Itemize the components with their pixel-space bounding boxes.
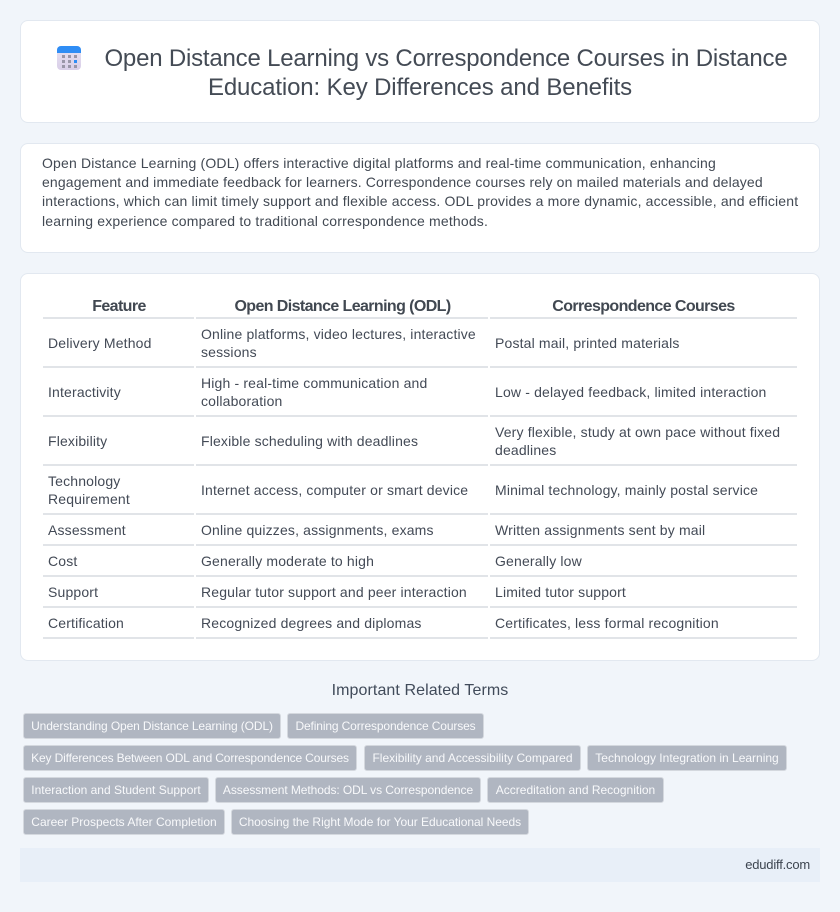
tag: Career Prospects After Completion	[31, 815, 217, 829]
table: Online platforms, video lectures, interactive	[201, 326, 476, 342]
row: interactivity: Interactivity	[48, 384, 121, 400]
tag: Assessment Methods: ODL vs Correspondence	[223, 783, 473, 797]
table header	[43, 298, 797, 319]
row: support: Support	[48, 584, 98, 600]
row: technology requirement: Requirement	[48, 491, 130, 507]
table: Limited tutor support	[495, 584, 626, 600]
tag: Understanding Open Distance Learning (ODL)	[31, 719, 273, 733]
tag	[23, 713, 281, 739]
row: assessment: Assessment	[48, 522, 126, 538]
related terms heading: Important Related Terms	[332, 682, 508, 699]
title	[104, 45, 788, 101]
tag: Defining Correspondence Courses	[295, 719, 476, 733]
summary text	[42, 155, 798, 229]
icon: calendar	[57, 46, 81, 70]
table: Minimal technology, mainly postal service	[495, 482, 758, 498]
row: delivery method: Delivery Method	[48, 335, 152, 351]
tag	[487, 777, 664, 803]
table: collaboration	[201, 393, 282, 409]
title: Open Distance Learning vs Correspondence Courses in Distance	[104, 45, 788, 72]
table: Regular tutor support and peer interaction	[201, 584, 467, 600]
table header: Open Distance Learning (ODL)	[234, 298, 451, 315]
table: Postal mail, printed materials	[495, 335, 680, 351]
table: Online quizzes, assignments, exams	[201, 522, 434, 538]
table: Very flexible, study at own pace without fixed	[495, 424, 780, 440]
tag: Accreditation and Recognition	[496, 783, 655, 797]
row: certification: Certification	[48, 615, 124, 631]
table: Generally moderate to high	[201, 553, 374, 569]
row: technology requirement: Technology	[48, 473, 120, 489]
tag	[364, 745, 581, 771]
row: flexibility: Flexibility	[48, 433, 107, 449]
footer text: edudiff.com	[745, 857, 810, 872]
table: Written assignments sent by mail	[495, 522, 705, 538]
table: Flexible scheduling with deadlines	[201, 433, 418, 449]
table: Certificates, less formal recognition	[495, 615, 719, 631]
related term tags	[23, 713, 787, 835]
tag	[215, 777, 481, 803]
table	[43, 298, 797, 639]
summary text: learning experience compared to traditional correspondence methods.	[42, 213, 488, 229]
title card	[20, 20, 820, 123]
tag	[231, 809, 529, 835]
tag: Choosing the Right Mode for Your Educational Needs	[239, 815, 521, 829]
footer bar	[20, 848, 820, 882]
tag	[587, 745, 787, 771]
table header: Feature	[92, 298, 146, 315]
table: Low - delayed feedback, limited interaction	[495, 384, 766, 400]
row: technology requirement	[48, 473, 130, 507]
table: sessions	[201, 344, 257, 360]
summary text: engagement and immediate feedback for learners. Correspondence courses rely on mailed materials and delayed	[42, 174, 763, 190]
table: Recognized degrees and diplomas	[201, 615, 422, 631]
table: deadlines	[495, 442, 556, 458]
summary text: interactions, which can limit timely support and flexible access. ODL provides a more dynamic, accessible, and efficient	[42, 193, 798, 209]
title: Education: Key Differences and Benefits	[208, 74, 632, 101]
table header: Correspondence Courses	[552, 298, 735, 315]
tag	[23, 745, 357, 771]
tag: Key Differences Between ODL and Correspondence Courses	[31, 751, 349, 765]
tag: Technology Integration in Learning	[595, 751, 779, 765]
row: cost: Cost	[48, 553, 77, 569]
tag	[23, 809, 225, 835]
table: Internet access, computer or smart device	[201, 482, 468, 498]
tag	[287, 713, 484, 739]
summary text: Open Distance Learning (ODL) offers interactive digital platforms and real-time communication, enhancing	[42, 155, 716, 171]
tag: Flexibility and Accessibility Compared	[372, 751, 573, 765]
table card	[20, 273, 820, 661]
tag: Interaction and Student Support	[31, 783, 201, 797]
summary card	[20, 143, 820, 253]
table: Generally low	[495, 553, 582, 569]
table: High - real-time communication and	[201, 375, 427, 391]
tag	[23, 777, 209, 803]
